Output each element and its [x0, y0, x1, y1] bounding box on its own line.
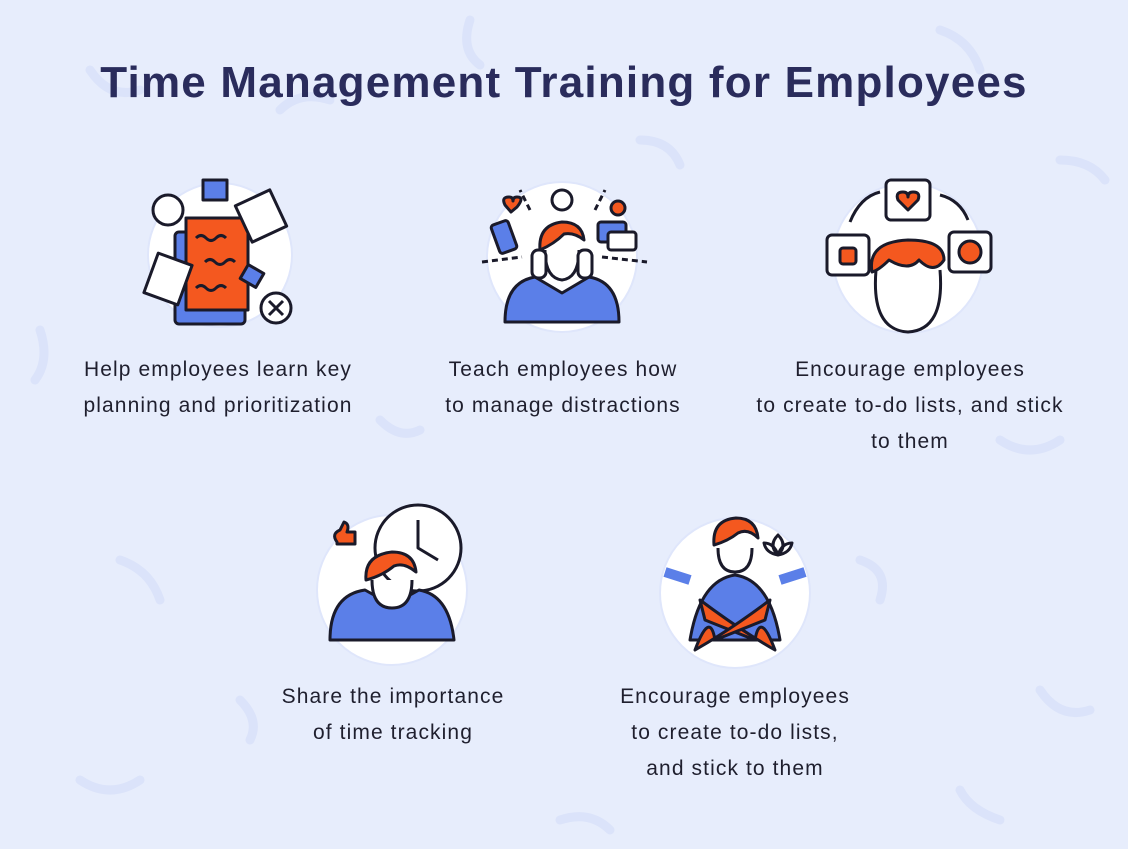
caption 3: to create to-do lists, and stick: [756, 394, 1064, 417]
caption 1: [83, 358, 353, 417]
caption 1: Help employees learn key: [84, 358, 352, 381]
caption 5: and stick to them: [646, 757, 824, 780]
caption 5: to create to-do lists,: [631, 721, 839, 744]
icon: to-do: [827, 180, 991, 333]
icon: distractions: [482, 182, 647, 332]
caption 2: [445, 358, 681, 417]
title: Time Management Training for Employees: [100, 58, 1028, 107]
caption 5: Encourage employees: [620, 685, 850, 708]
caption 2: Teach employees how: [449, 358, 677, 381]
caption 3: [756, 358, 1064, 453]
caption 3: to them: [871, 430, 949, 453]
caption 4: Share the importance: [282, 685, 504, 708]
caption 3: Encourage employees: [795, 358, 1025, 381]
icon: time tracking: [317, 505, 467, 665]
caption 5: [620, 685, 850, 780]
caption 4: [282, 685, 504, 744]
caption 4: of time tracking: [313, 721, 473, 744]
caption 1: planning and prioritization: [83, 394, 353, 417]
caption 2: to manage distractions: [445, 394, 681, 417]
icon: mindfulness: [660, 518, 810, 668]
